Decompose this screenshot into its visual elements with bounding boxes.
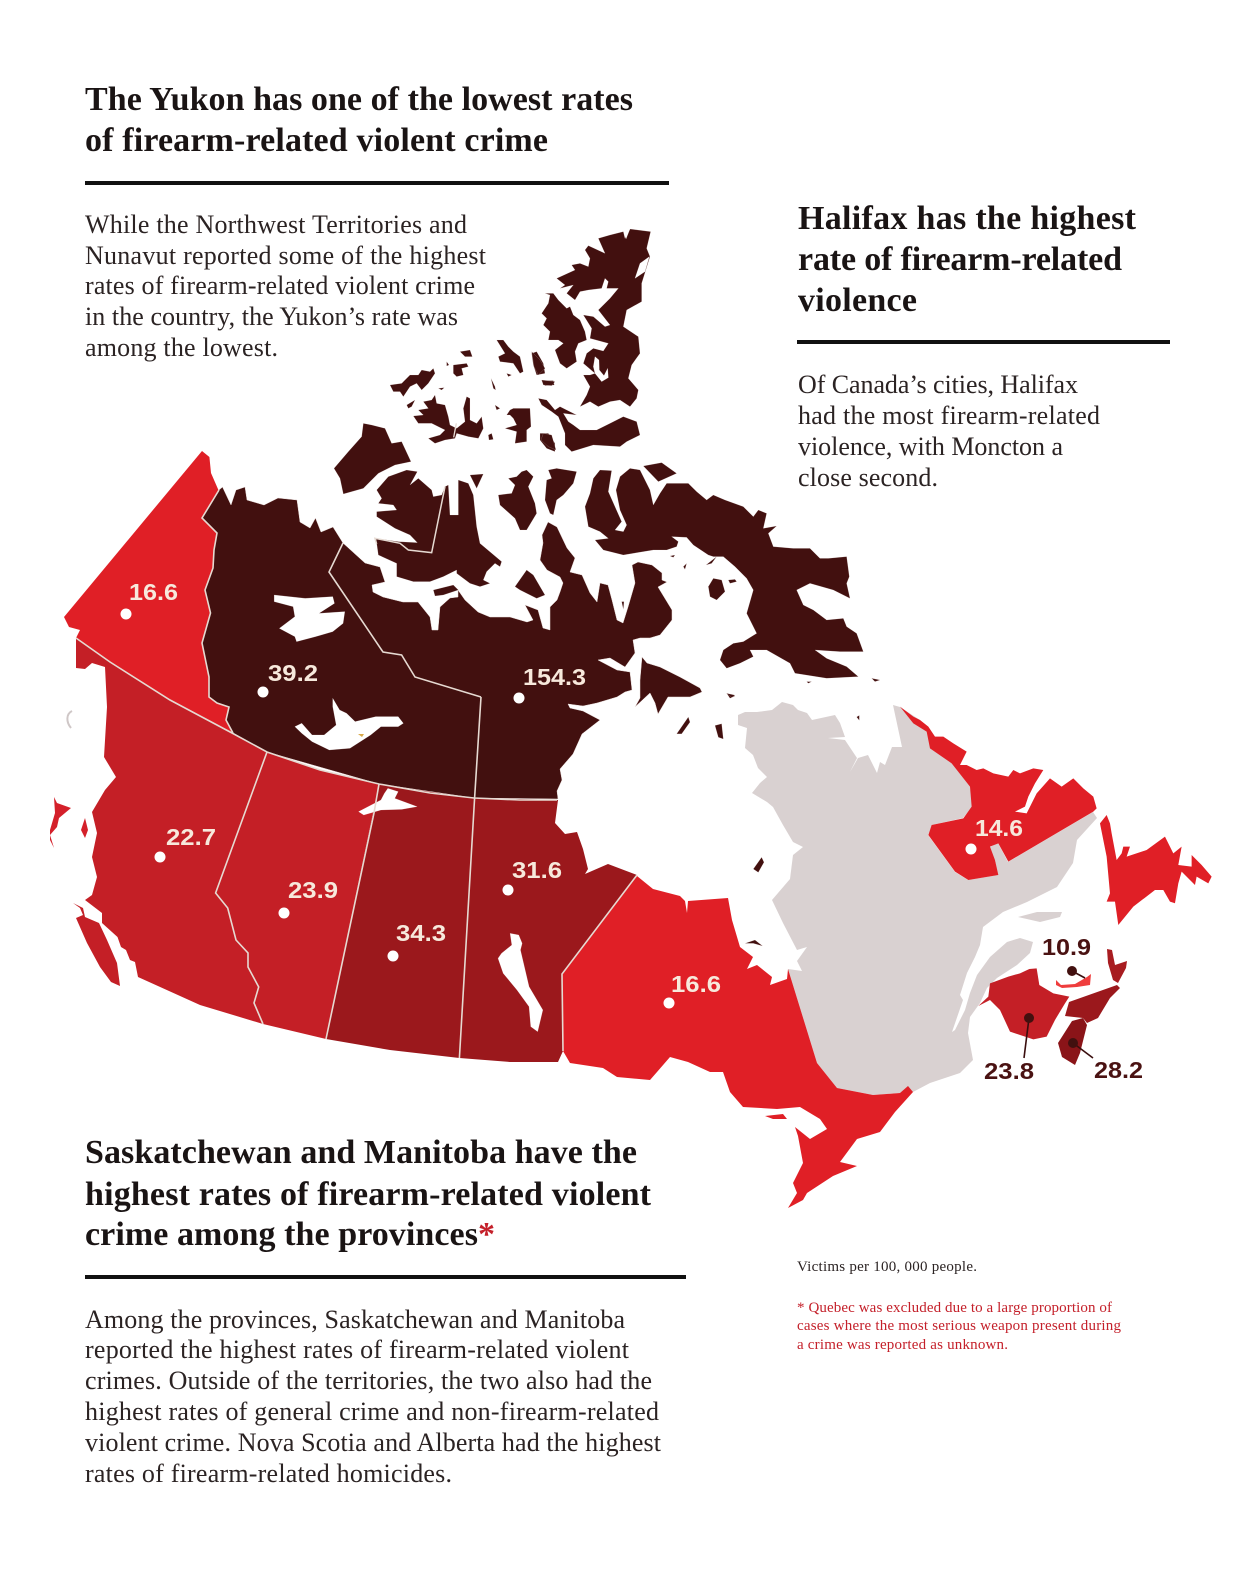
Lake Athabasca xyxy=(359,788,417,815)
small island north of Somerset xyxy=(470,474,483,488)
region: Alberta xyxy=(216,752,379,1039)
body text: Saskatchewan and Manitoba: reported the highest rates of firearm-related violent xyxy=(85,1335,630,1364)
value: Nunavut 154.3 xyxy=(514,664,586,704)
panel: Saskatchewan and Manitoba text xyxy=(85,1134,686,1488)
heading: Halifax xyxy=(798,200,1137,319)
body text: Yukon: among the lowest. xyxy=(85,333,278,362)
Southampton Island xyxy=(635,657,702,714)
body text: Yukon: Nunavut reported some of the highest xyxy=(85,241,487,270)
Ellesmere Island xyxy=(557,229,651,407)
body text: Saskatchewan and Manitoba xyxy=(85,1305,662,1488)
heading: Yukon: The Yukon has one of the lowest rates xyxy=(85,81,633,118)
body text: Saskatchewan and Manitoba: rates of firearm-related homicides. xyxy=(85,1459,452,1488)
value: Newfoundland and Labrador 14.6: 14.6 xyxy=(975,815,1023,841)
value: Nova Scotia 28.2: 28.2 xyxy=(1094,1057,1143,1083)
region: Quebec xyxy=(738,702,1097,1095)
map of Canada xyxy=(50,229,1212,1208)
lakes xyxy=(274,595,543,1032)
heading: Halifax: violence xyxy=(798,282,917,319)
rule: Halifax xyxy=(797,340,1170,344)
value: Yukon 16.6: 16.6 xyxy=(129,579,178,605)
Ellesmere fjords xyxy=(593,229,649,382)
region: Saskatchewan xyxy=(326,784,475,1058)
heading: Saskatchewan and Manitoba: highest rates of firearm-related violent xyxy=(85,1176,652,1213)
Anticosti Island xyxy=(1018,912,1062,922)
heading: Saskatchewan and Manitoba: Saskatchewan and Manitoba have the xyxy=(85,1134,637,1171)
value: Yukon 16.6 xyxy=(120,579,178,620)
Arctic islands xyxy=(334,229,880,946)
Haida Gwaii xyxy=(50,797,71,848)
footnote: Quebec exclusion: * Quebec was excluded due to a large proportion of xyxy=(797,1300,1112,1316)
value: Nova Scotia 28.2 xyxy=(1068,1038,1143,1083)
Banks Island xyxy=(334,423,411,494)
heading: Halifax: Halifax has the highest xyxy=(798,200,1137,237)
body text: Saskatchewan and Manitoba: violent crime. Nova Scotia and Alberta had the highest xyxy=(85,1428,662,1457)
value: Prince Edward Island 10.9 xyxy=(1042,934,1091,978)
body text: Halifax: violence, with Moncton a xyxy=(798,432,1063,461)
value: Manitoba 31.6 xyxy=(502,857,562,896)
value: New Brunswick 23.8: 23.8 xyxy=(984,1058,1034,1084)
value: British Columbia 22.7 xyxy=(154,824,216,862)
region: Prince Edward Island xyxy=(1056,974,1091,988)
value: Ontario 16.6: 16.6 xyxy=(671,971,721,997)
Hudson Bay islands xyxy=(677,693,859,946)
Foxe Basin islands xyxy=(708,578,725,600)
value: Nunavut 154.3: 154.3 xyxy=(523,664,586,690)
Bathurst Island group xyxy=(413,395,483,443)
Devon Island xyxy=(538,398,640,452)
heading: Saskatchewan and Manitoba xyxy=(85,1134,652,1253)
value: New Brunswick 23.8 xyxy=(984,1013,1034,1084)
Baffin Island xyxy=(585,468,863,678)
Somerset Island xyxy=(498,470,537,530)
region: Ontario xyxy=(562,876,913,1208)
note: units: Victims per 100, 000 people. xyxy=(797,1259,977,1275)
value: Saskatchewan 34.3 xyxy=(388,920,446,962)
body text: Saskatchewan and Manitoba: crimes. Outside of the territories, the two also had the xyxy=(85,1366,652,1395)
small grey islet xyxy=(67,711,72,728)
region: British Columbia xyxy=(50,638,267,1024)
Cornwallis Island group xyxy=(505,408,531,443)
panel: Halifax text xyxy=(797,200,1170,492)
value: British Columbia 22.7: 22.7 xyxy=(166,824,216,850)
rule: Yukon xyxy=(85,181,669,185)
body text: Saskatchewan and Manitoba: highest rates of general crime and non-firearm-related xyxy=(85,1397,659,1426)
small islet in Great Slave Lake xyxy=(358,734,364,737)
body text: Halifax: had the most firearm-related xyxy=(798,401,1100,430)
Bylot Island xyxy=(643,463,677,482)
body text: Halifax: close second. xyxy=(798,463,938,492)
Vancouver Island xyxy=(73,903,120,986)
value: Northwest Territories 39.2: 39.2 xyxy=(268,660,318,686)
Manitoulin Island xyxy=(765,1114,787,1119)
Great Bear Lake xyxy=(274,595,345,642)
rule: Saskatchewan and Manitoba xyxy=(85,1275,686,1279)
body text: Yukon: in the country, the Yukon’s rate was xyxy=(85,302,458,331)
heading: Halifax: rate of firearm-related xyxy=(798,241,1122,278)
Melville Island xyxy=(390,368,435,397)
body text: Saskatchewan and Manitoba: Among the provinces, Saskatchewan and Manitoba xyxy=(85,1305,625,1334)
value: Ontario 16.6 xyxy=(664,971,721,1008)
value: Prince Edward Island 10.9: 10.9 xyxy=(1042,934,1091,960)
body text: Halifax: Of Canada’s cities, Halifax xyxy=(798,370,1078,399)
value: Alberta 23.9 xyxy=(278,877,338,918)
territorial boundary lines xyxy=(76,423,637,1058)
Great Slave Lake xyxy=(295,698,403,750)
body text: Yukon: rates of firearm-related violent crime xyxy=(85,271,475,300)
footnote: Quebec exclusion: a crime was reported as unknown. xyxy=(797,1337,1008,1353)
Axel Heiberg Island xyxy=(542,293,587,368)
heading: Yukon xyxy=(85,81,633,159)
footnote: Quebec exclusion xyxy=(797,1300,1122,1353)
value: Northwest Territories 39.2 xyxy=(258,660,318,698)
value: Manitoba 31.6: 31.6 xyxy=(512,857,562,883)
body text: Halifax xyxy=(798,370,1100,492)
body text: Yukon xyxy=(85,210,487,362)
Victoria Island xyxy=(376,470,502,587)
region: Northwest Territories and Nunavut mainland xyxy=(202,487,672,799)
footnote: Quebec exclusion: cases where the most serious weapon present during xyxy=(797,1318,1122,1334)
body text: Yukon: While the Northwest Territories and xyxy=(85,210,467,239)
region: New Brunswick xyxy=(978,968,1069,1039)
heading: Yukon: of firearm-related violent crime xyxy=(85,122,548,159)
panel: Yukon text xyxy=(85,81,669,362)
Sverdrup Islands xyxy=(497,340,523,373)
region: Newfoundland and Labrador xyxy=(900,707,1212,925)
region: Yukon xyxy=(64,451,233,733)
value: Saskatchewan 34.3: 34.3 xyxy=(396,920,446,946)
value: Alberta 23.9: 23.9 xyxy=(288,877,338,903)
value: Newfoundland and Labrador 14.6 xyxy=(966,815,1023,854)
Prince of Wales Island xyxy=(545,468,577,515)
region: Nova Scotia xyxy=(1058,949,1127,1065)
region: Manitoba xyxy=(459,798,637,1062)
Lake Winnipeg xyxy=(498,933,543,1032)
heading: Saskatchewan and Manitoba: crime among the provinces* xyxy=(85,1216,495,1253)
